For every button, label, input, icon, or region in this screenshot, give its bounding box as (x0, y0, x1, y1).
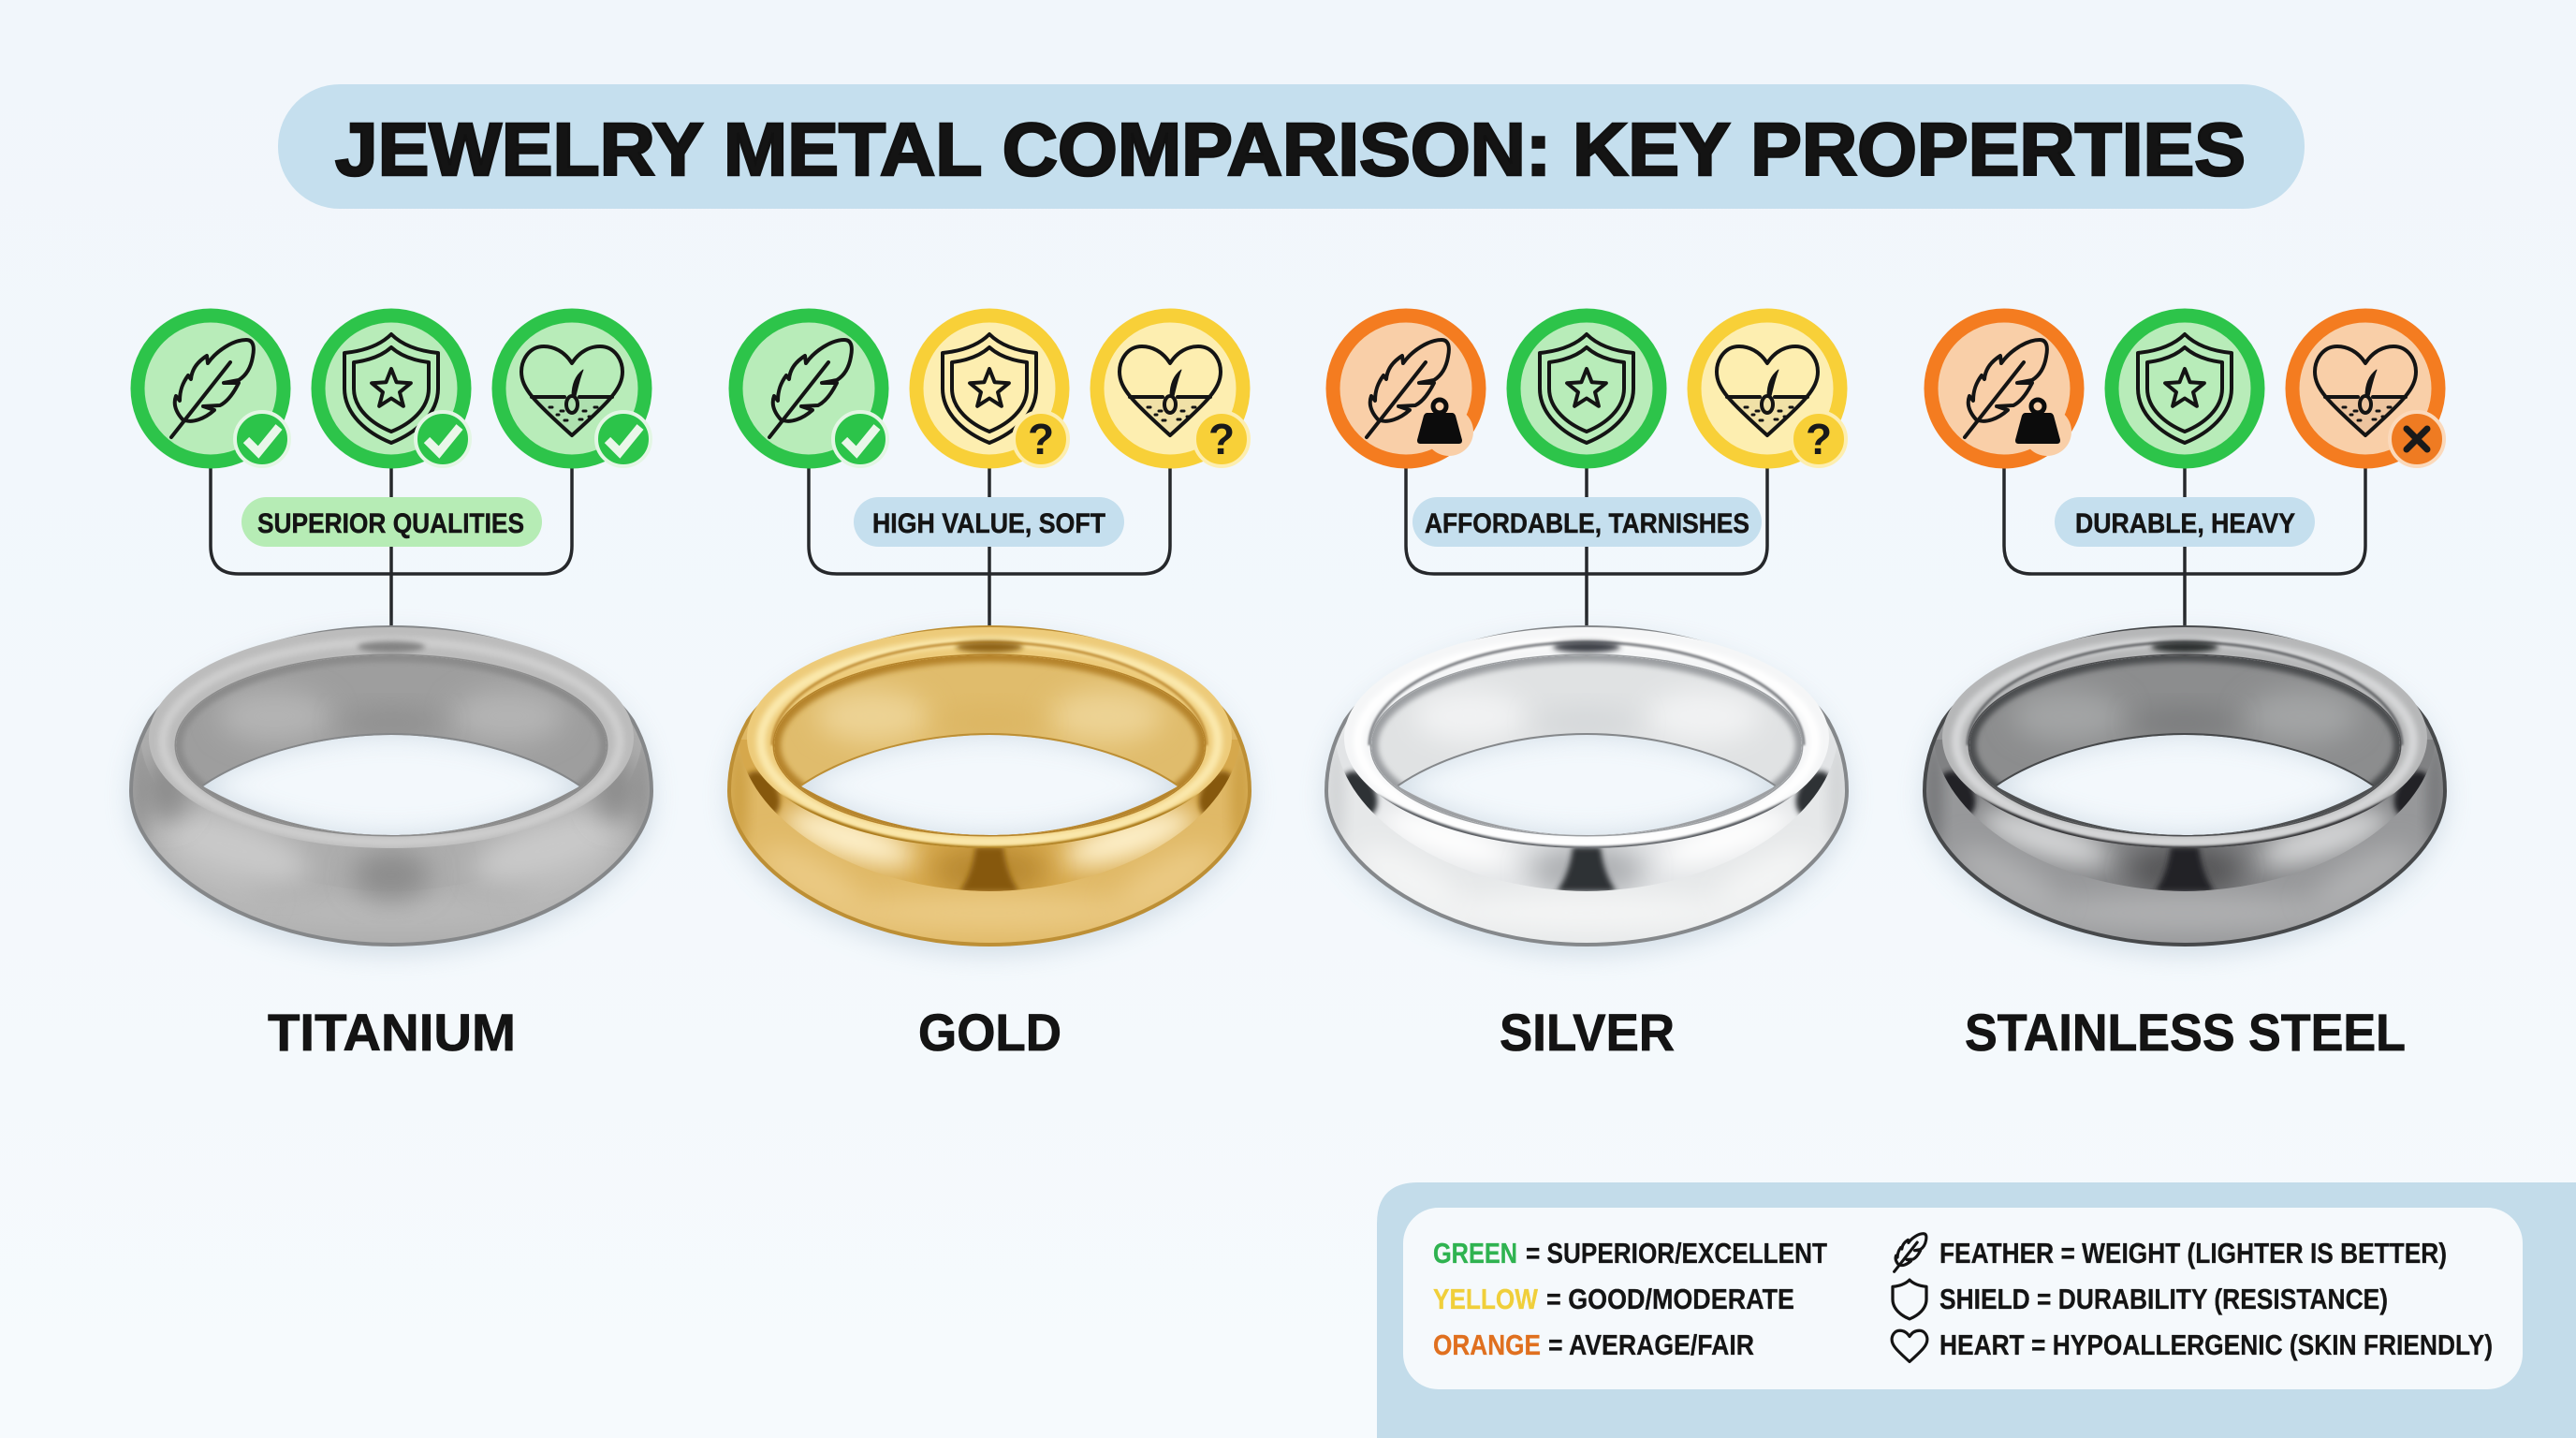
tag: affordable, tarnishes: AFFORDABLE, TARNISHES (1425, 508, 1749, 539)
legend: colour key: = SUPERIOR/EXCELLENT (1526, 1237, 1827, 1269)
legend panel (1377, 1182, 2576, 1438)
legend: colour key: GREEN (1433, 1237, 1517, 1269)
title banner (278, 84, 2305, 209)
label: gold: GOLD (918, 1003, 1061, 1062)
icon: gold hypoallergenic, moderate: ? (1208, 415, 1235, 463)
icon: silver hypoallergenic, moderate: ? (1806, 415, 1832, 463)
icon: steel hypoallergenic, average (2292, 315, 2444, 466)
ring: stainless steel (1913, 618, 2456, 955)
tag: durable, heavy: DURABLE, HEAVY (2075, 508, 2295, 539)
icon: titanium durability, superior (318, 315, 470, 466)
icon: gold weight, superior (736, 315, 887, 466)
icon: steel durability, superior (2112, 315, 2258, 462)
tag: high value, soft (854, 497, 1124, 547)
icon: silver hypoallergenic, moderate (1694, 315, 1846, 466)
legend: icon key: FEATHER = WEIGHT (LIGHTER IS BETTER) (1939, 1237, 2447, 1269)
tag: high value, soft: HIGH VALUE, SOFT (872, 508, 1105, 539)
column: silver (1315, 315, 1858, 1062)
legend: icon key (1892, 1234, 2493, 1361)
icon: silver weight, average (1333, 315, 1479, 462)
column: gold (718, 315, 1261, 1062)
icon: silver durability, superior (1514, 315, 1660, 462)
tag: superior qualities: SUPERIOR QUALITIES (257, 508, 524, 539)
icon: titanium weight, superior (138, 315, 289, 466)
icon: gold hypoallergenic, moderate (1097, 315, 1249, 466)
label: stainless steel: STAINLESS STEEL (1965, 1003, 2406, 1062)
tag: durable, heavy (2055, 497, 2315, 547)
legend: colour key: YELLOW (1433, 1283, 1539, 1315)
icon: gold durability, moderate: ? (1028, 415, 1054, 463)
legend: colour key: = AVERAGE/FAIR (1548, 1328, 1754, 1361)
icon: titanium hypoallergenic, superior (499, 315, 651, 466)
legend: colour key: ORANGE (1433, 1328, 1541, 1361)
legend: icon key: SHIELD = DURABILITY (RESISTANCE) (1939, 1283, 2388, 1315)
tag: superior qualities (242, 497, 542, 547)
ring: silver (1315, 618, 1858, 955)
column: titanium (120, 315, 663, 1062)
legend: colour key (1433, 1237, 1827, 1361)
icon: steel weight, average (1931, 315, 2077, 462)
ring: titanium (120, 618, 663, 955)
tag: affordable, tarnishes (1412, 497, 1762, 547)
label: titanium: TITANIUM (268, 1003, 516, 1062)
title banner: JEWELRY METAL COMPARISON: KEY PROPERTIES (335, 108, 2246, 191)
legend: icon key: HEART = HYPOALLERGENIC (SKIN FRIENDLY) (1939, 1328, 2493, 1361)
label: silver: SILVER (1500, 1003, 1675, 1062)
icon: gold durability, moderate (916, 315, 1068, 466)
column: stainless steel (1913, 315, 2456, 1062)
legend: colour key: = GOOD/MODERATE (1546, 1283, 1794, 1315)
ring: gold (718, 618, 1261, 955)
